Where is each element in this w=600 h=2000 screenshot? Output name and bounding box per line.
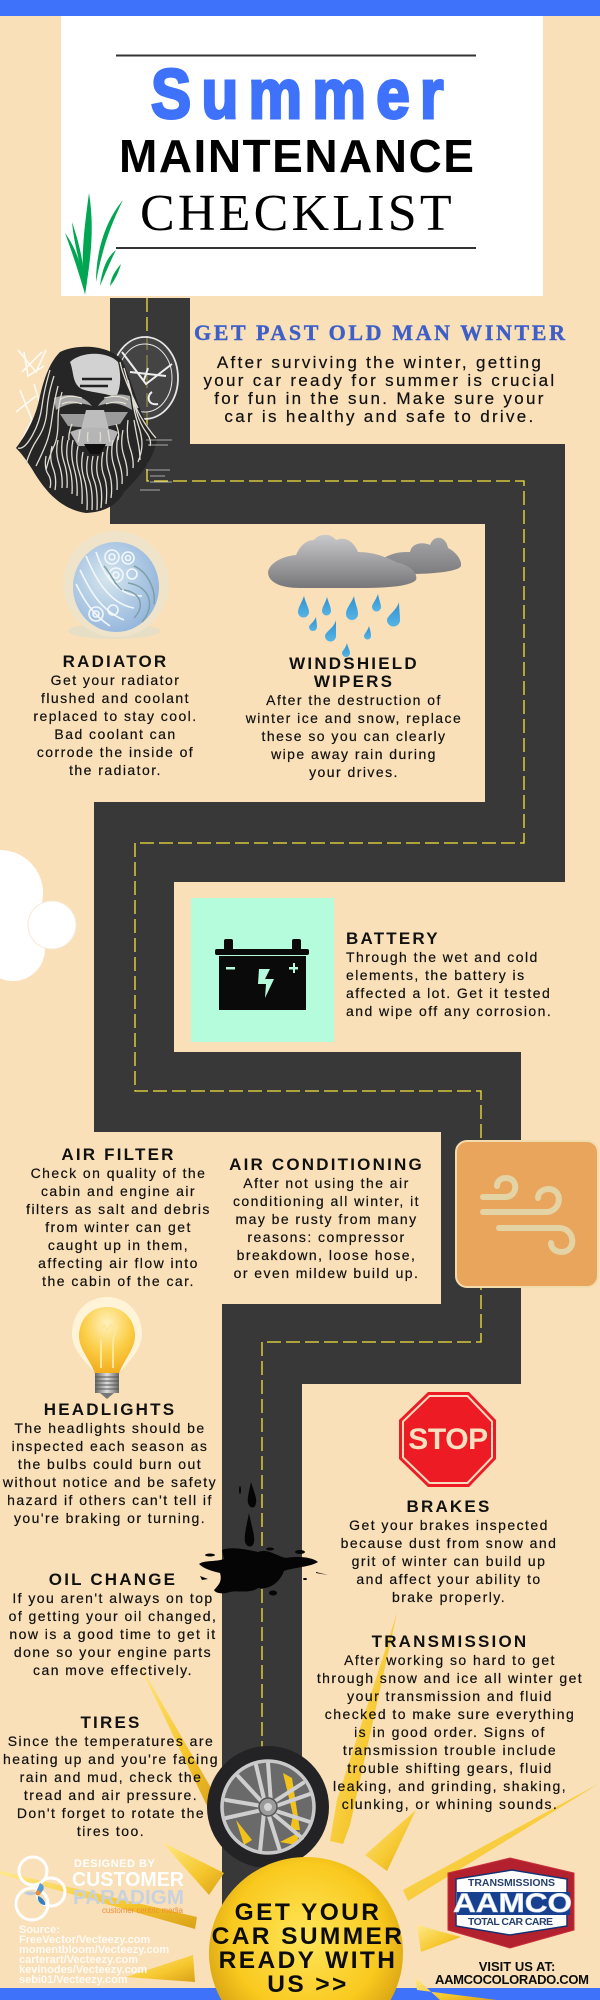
section: tires — [3, 1713, 219, 1839]
text: tires — [3, 1733, 219, 1839]
heading: windshield wipers: WIPERS — [314, 672, 394, 691]
heading: windshield wipers — [289, 654, 419, 691]
text: radiator: corrode the inside of — [37, 744, 194, 760]
text: transmission: After working so hard to get — [344, 1652, 556, 1668]
text: call to action: CAR SUMMER — [212, 1923, 404, 1950]
intro text: your car ready for summer is crucial — [204, 371, 556, 390]
section: brakes — [341, 1392, 557, 1605]
logo: customer paradigm: DESIGNED BY — [74, 1858, 155, 1870]
text: air filter: filters as salt and debris — [26, 1201, 211, 1217]
text: air filter — [26, 1165, 211, 1289]
text: battery — [346, 949, 552, 1019]
text: air conditioning: reasons: compressor — [247, 1229, 406, 1245]
text: sources: Source: — [19, 1924, 60, 1936]
text: brakes: because dust from snow and — [341, 1535, 557, 1551]
title panel — [61, 16, 543, 296]
intro text: car is healthy and safe to drive. — [224, 407, 536, 426]
text: oil change: can move effectively. — [33, 1662, 193, 1678]
text: headlights: The headlights should be — [14, 1420, 206, 1436]
text: air filter: caught up in them, — [48, 1237, 189, 1253]
text: brakes — [341, 1517, 557, 1605]
icon: car tire — [207, 1746, 329, 1868]
section: air conditioning — [229, 1141, 598, 1287]
text: transmission: is in good order. Signs of — [354, 1724, 546, 1740]
text: headlights: inspected each season as — [12, 1438, 208, 1454]
text: brakes: Get your brakes inspected — [349, 1517, 549, 1533]
text: visit us at — [435, 1959, 589, 1987]
text: transmission: transmission trouble include — [343, 1742, 557, 1758]
text: sources — [19, 1924, 169, 1986]
heading: air filter: AIR FILTER — [61, 1145, 176, 1164]
text: oil change: done so your engine parts — [14, 1644, 212, 1660]
icon: stop sign — [399, 1392, 496, 1487]
heading: brakes: BRAKES — [406, 1497, 492, 1516]
call to action sun — [209, 1857, 404, 2000]
text: sources: carterart/Vecteezy.com — [19, 1954, 138, 1966]
text: call to action: US >> — [267, 1971, 349, 1998]
text: brakes: brake properly. — [392, 1589, 506, 1605]
heading: radiator: RADIATOR — [63, 652, 168, 671]
text: air filter: the cabin of the car. — [42, 1273, 195, 1289]
illustration: old man winter — [16, 337, 178, 513]
text: air conditioning — [233, 1175, 420, 1281]
text: tires: tread and air pressure. — [24, 1787, 198, 1803]
text: oil change: now is a good time to get it — [9, 1626, 217, 1642]
text: headlights: without notice and be safety — [2, 1474, 217, 1490]
text: radiator: Get your radiator — [51, 672, 180, 688]
text: air filter: cabin and engine air — [41, 1183, 196, 1199]
text: radiator: Bad coolant can — [54, 726, 177, 742]
heading: oil change: OIL CHANGE — [49, 1570, 177, 1589]
sun rays — [0, 1613, 600, 2000]
text: air filter: from winter can get — [45, 1219, 192, 1235]
text: headlights: the bulbs could burn out — [18, 1456, 202, 1472]
icon: stop sign: STOP — [408, 1423, 488, 1456]
text: oil change: If you aren't always on top — [12, 1590, 214, 1606]
heading: get past old man winter: GET PAST OLD MAN WINTER — [194, 320, 568, 345]
text: sources: FreeVector/Vecteezy.com — [19, 1934, 150, 1946]
text: tires: heating up and you're facing — [3, 1751, 219, 1767]
icon: wind tile — [456, 1141, 598, 1287]
text: headlights: you're braking or turning. — [14, 1510, 206, 1526]
text: tires: rain and mud, check the — [20, 1769, 202, 1785]
text: windshield wipers: After the destruction of — [266, 692, 442, 708]
text: battery: Through the wet and cold — [346, 949, 539, 965]
text: windshield wipers: winter ice and snow, replace — [245, 710, 462, 726]
heading: air conditioning: AIR CONDITIONING — [229, 1155, 424, 1174]
logo: customer paradigm — [16, 1857, 185, 1920]
text: brakes: grit of winter can build up — [352, 1553, 546, 1569]
section: radiator — [33, 531, 198, 778]
title: Checklist: CHECKLIST — [140, 185, 455, 242]
text: transmission: checked to make sure everything — [325, 1706, 575, 1722]
logo: customer paradigm: customer centric media — [102, 1906, 184, 1915]
winding road — [94, 298, 565, 1965]
text: call to action: GET YOUR — [235, 1899, 381, 1926]
logo: customer paradigm: CUSTOMER — [72, 1869, 185, 1891]
section: transmission — [317, 1632, 583, 1812]
text: visit us at: VISIT US AT: — [479, 1959, 555, 1974]
text: transmission: leaking, and grinding, shaking, — [333, 1778, 567, 1794]
text: transmission: clunking, or whining sounds. — [342, 1796, 558, 1812]
title: Maintenance: MAINTENANCE — [119, 130, 475, 182]
section: air filter — [26, 1145, 211, 1289]
text: transmission — [317, 1652, 583, 1812]
text: oil change: of getting your oil changed, — [9, 1608, 217, 1624]
logo: customer paradigm: PARADIGM — [73, 1887, 184, 1909]
logo: AAMCO: AAMCO — [453, 1888, 572, 1918]
text: air filter: Check on quality of the — [31, 1165, 206, 1181]
logo: AAMCO: TRANSMISSIONS — [468, 1877, 555, 1889]
text: sources: sebi01/Vecteezy.com — [19, 1974, 128, 1986]
section: battery — [191, 898, 552, 1042]
text: tires: Don't forget to rotate the — [17, 1805, 205, 1821]
text: air conditioning: After not using the air — [243, 1175, 410, 1191]
text: battery: and wipe off any corrosion. — [346, 1003, 552, 1019]
icon: battery tile — [191, 898, 334, 1042]
text: windshield wipers: wipe away rain during — [270, 746, 437, 762]
text: battery: elements, the battery is — [346, 967, 526, 983]
text: call to action — [212, 1899, 404, 1998]
heading: transmission: TRANSMISSION — [372, 1632, 528, 1651]
title: Summer: Summer — [151, 55, 454, 133]
text: radiator: the radiator. — [69, 762, 162, 778]
intro text: After surviving the winter, getting — [217, 353, 543, 372]
bottom blue bar — [0, 1988, 600, 2000]
text: sources: momentbloom/Vecteezy.com — [19, 1944, 169, 1956]
logo: AAMCO — [448, 1858, 574, 1948]
text: air filter: affecting air flow into — [38, 1255, 199, 1271]
text: air conditioning: or even mildew build up. — [234, 1265, 419, 1281]
text: windshield wipers: these so you can clearly — [262, 728, 446, 744]
icon: oil spill — [199, 1482, 328, 1596]
decorative white cloud — [0, 850, 76, 981]
section: oil change — [9, 1482, 328, 1678]
icon: rain clouds — [268, 535, 461, 657]
section: headlights — [2, 1297, 217, 1526]
text: tires: tires too. — [77, 1823, 145, 1839]
text: call to action: READY WITH — [219, 1947, 397, 1974]
icon: grass — [65, 193, 123, 295]
text: sources: kevinodes/Vecteezy.com — [19, 1964, 147, 1976]
text: air conditioning: breakdown, loose hose, — [237, 1247, 416, 1263]
icon: light bulb — [72, 1297, 142, 1399]
intro text: for fun in the sun. Make sure your — [214, 389, 546, 408]
heading: windshield wipers: WINDSHIELD — [289, 654, 419, 673]
section: windshield wipers — [245, 535, 462, 780]
text: headlights: hazard if others can't tell if — [7, 1492, 213, 1508]
text: windshield wipers: your drives. — [309, 764, 399, 780]
text: battery: affected a lot. Get it tested — [346, 985, 551, 1001]
text: air conditioning: conditioning all winter, it — [233, 1193, 420, 1209]
text: tires: Since the temperatures are — [8, 1733, 214, 1749]
text: windshield wipers — [245, 692, 462, 780]
text: radiator — [33, 672, 198, 778]
heading: tires: TIRES — [80, 1713, 142, 1732]
text: transmission: through snow and ice all winter get — [317, 1670, 583, 1686]
heading: battery: BATTERY — [346, 929, 440, 948]
text: radiator: flushed and coolant — [41, 690, 190, 706]
text: transmission: trouble shifting gears, fluid — [347, 1760, 553, 1776]
text: visit us at: AAMCOCOLORADO.COM — [435, 1972, 589, 1987]
text: oil change — [9, 1590, 217, 1678]
heading: headlights: HEADLIGHTS — [44, 1400, 176, 1419]
top blue bar — [0, 0, 600, 16]
icon: radiator swirl ball — [63, 531, 169, 639]
text: radiator: replaced to stay cool. — [33, 708, 198, 724]
text: transmission: your transmission and fluid — [347, 1688, 553, 1704]
intro text — [204, 353, 556, 426]
text: air conditioning: may be rusty from many — [235, 1211, 418, 1227]
logo: AAMCO: TOTAL CAR CARE — [468, 1916, 553, 1928]
text: brakes: and affect your ability to — [356, 1571, 542, 1587]
text: headlights — [2, 1420, 217, 1526]
